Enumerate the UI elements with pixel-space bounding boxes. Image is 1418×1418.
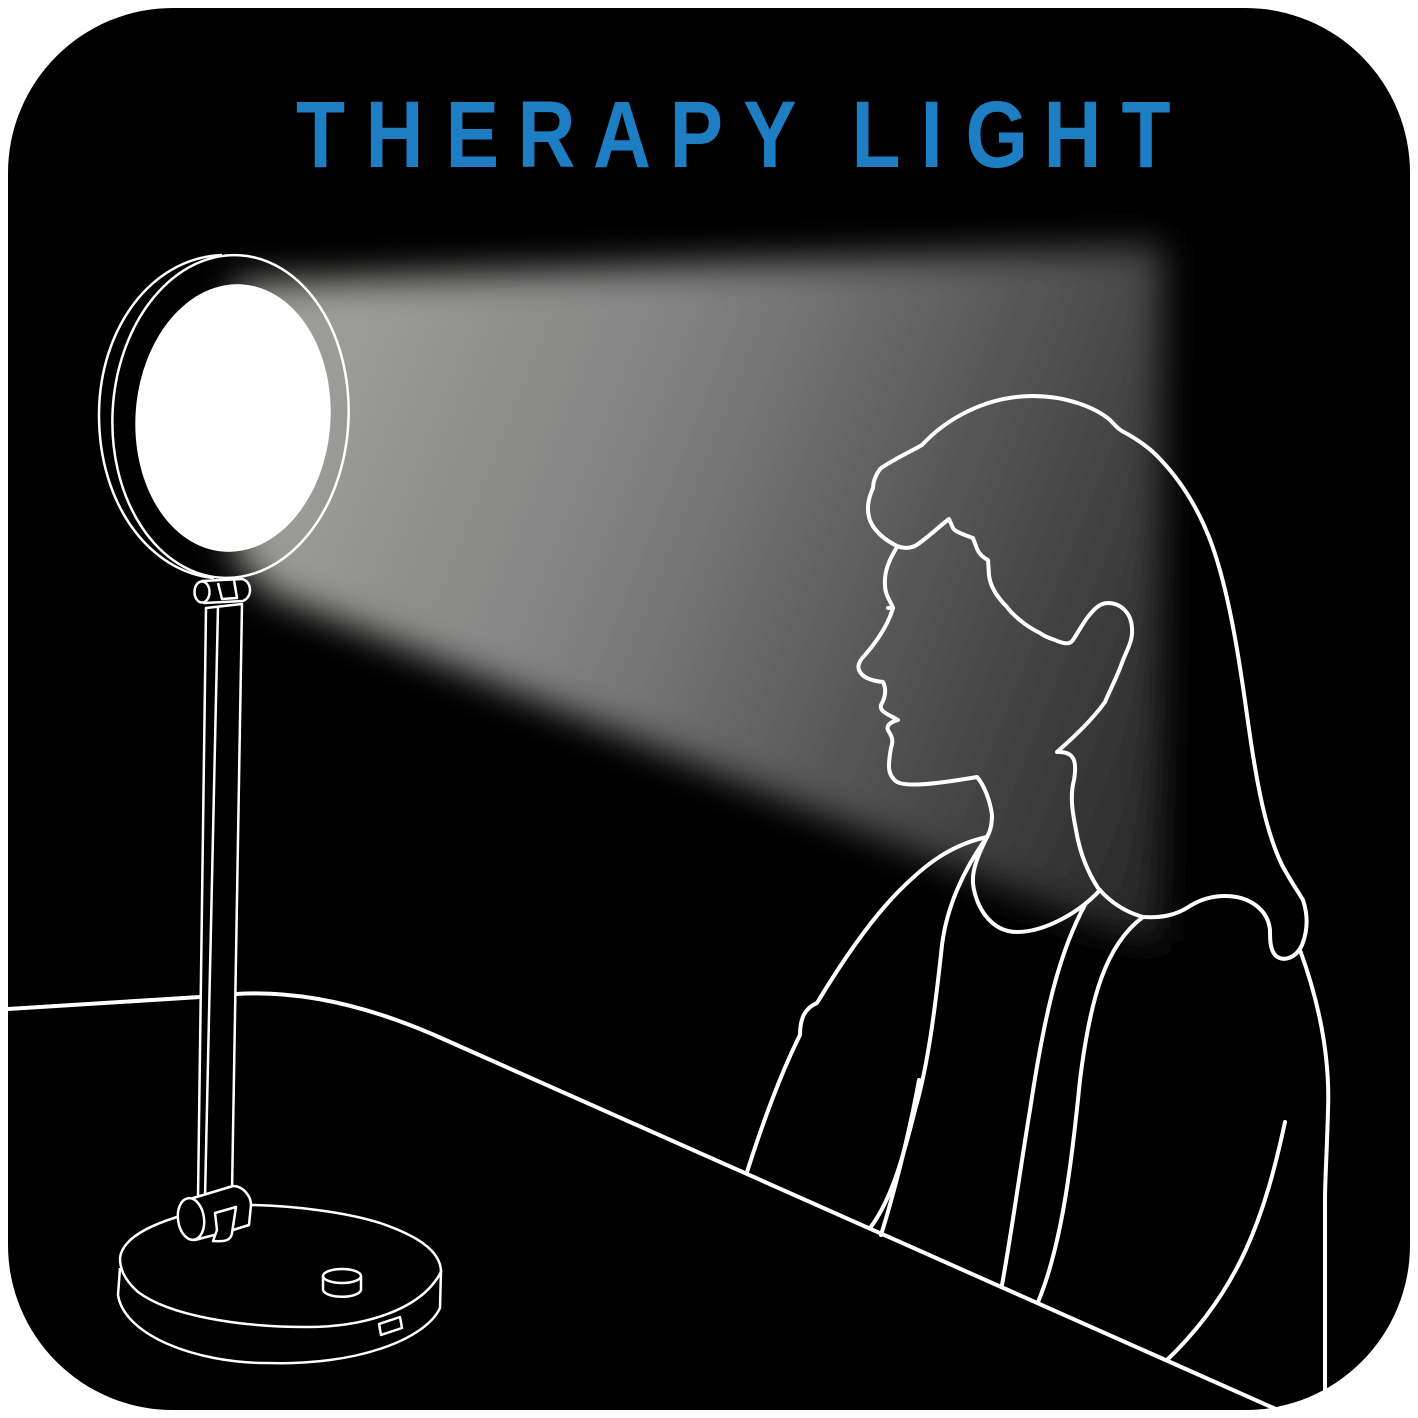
neck opening xyxy=(973,837,1100,932)
lamp rear rim xyxy=(99,255,222,578)
figure: woman outline xyxy=(747,396,1328,1392)
icon: lamp head xyxy=(99,249,357,584)
lamp hinge xyxy=(202,579,250,603)
jacket fold xyxy=(881,1080,919,1235)
hair xyxy=(868,396,1307,959)
icon: knob xyxy=(323,1269,361,1297)
back line xyxy=(1300,950,1328,1392)
inner jacket line xyxy=(1002,903,1086,1285)
icon: clamp xyxy=(175,1186,251,1242)
desk edge xyxy=(8,993,1278,1410)
sleeve seam xyxy=(1038,917,1143,1302)
base top edge xyxy=(120,1205,441,1327)
arm line xyxy=(1167,1122,1285,1360)
shoulder and arm xyxy=(747,837,987,1172)
title: THERAPY LIGHT xyxy=(296,82,1171,187)
face xyxy=(858,547,992,837)
lamp glowing disc xyxy=(126,278,340,558)
pole xyxy=(198,604,242,1198)
icon: lamp stand xyxy=(194,579,250,1198)
lamp front rim xyxy=(104,249,357,584)
icon: port xyxy=(379,1317,402,1335)
light beam xyxy=(232,245,1162,945)
base side wall xyxy=(118,1268,441,1363)
jacket lapel xyxy=(870,837,987,1228)
icon: lamp base xyxy=(118,1186,441,1363)
